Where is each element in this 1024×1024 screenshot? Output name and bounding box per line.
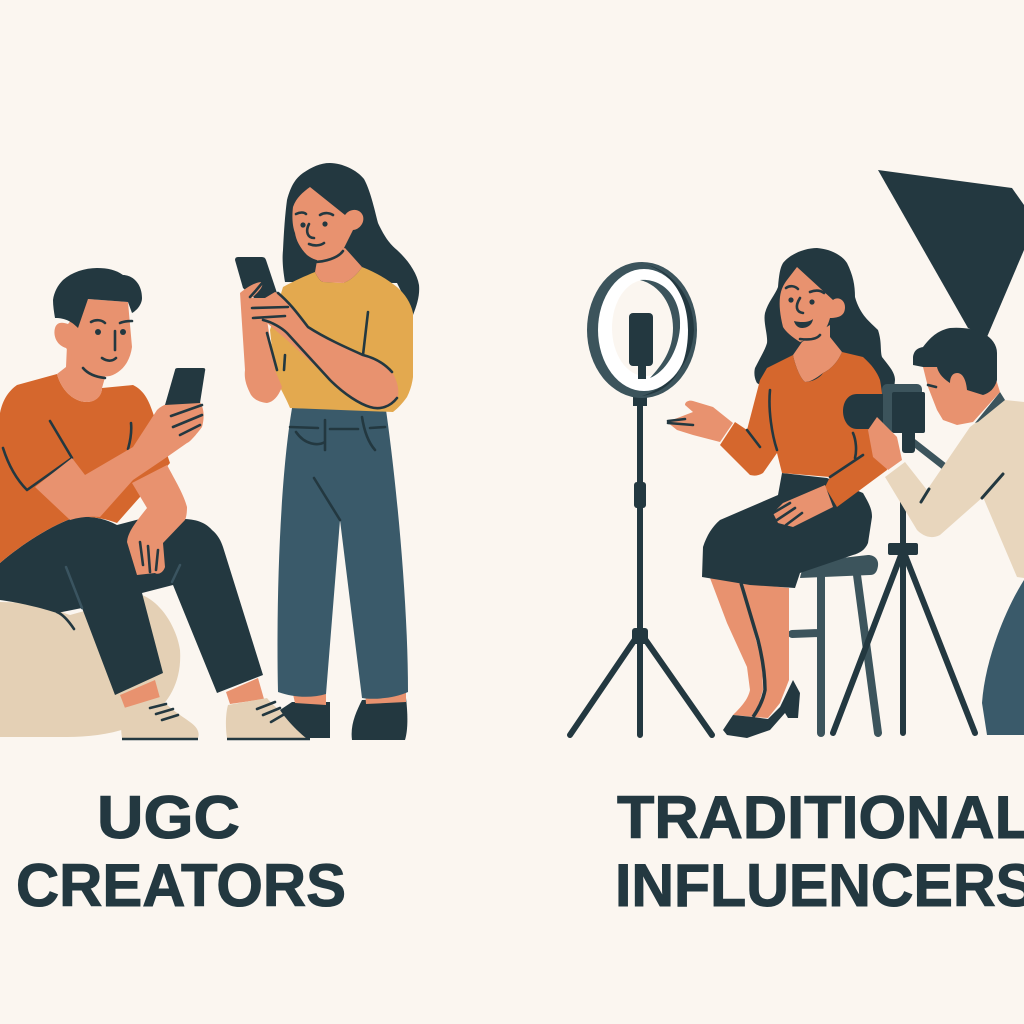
icon: ring light on tripod	[570, 262, 712, 735]
heading: UGC Creators: UGC	[97, 784, 240, 851]
crescent	[640, 280, 680, 378]
tripod	[570, 395, 712, 735]
tripod	[833, 442, 975, 733]
face details	[786, 286, 824, 340]
beanbag	[0, 595, 180, 737]
face	[292, 187, 363, 262]
far arm resting on knee	[127, 465, 187, 575]
orange blouse	[720, 352, 887, 507]
hand on knee	[773, 485, 833, 527]
stool	[792, 555, 878, 733]
illustration: seated UGC creator on beanbag	[0, 268, 310, 739]
ring	[587, 262, 697, 398]
head	[54, 299, 132, 377]
gesturing hand	[667, 401, 733, 442]
hair back	[283, 163, 419, 315]
beige jacket	[885, 400, 1024, 578]
phone	[165, 368, 205, 405]
neck	[793, 325, 842, 382]
shoes	[280, 702, 330, 738]
face details	[83, 320, 132, 378]
heading: Traditional Influencers: TRADITIONAL	[617, 784, 1024, 851]
ankles	[120, 678, 264, 708]
hair	[53, 268, 142, 328]
orange t-shirt	[0, 374, 170, 563]
heading: UGC Creators	[16, 784, 346, 919]
illustration: photographer with camera	[833, 328, 1024, 735]
illustration: seated influencer	[667, 248, 895, 738]
near arm with hand	[35, 401, 204, 520]
face details	[296, 212, 343, 262]
right arm and hand	[240, 282, 398, 408]
face	[780, 267, 845, 342]
phone	[629, 313, 653, 366]
yellow top	[270, 267, 413, 412]
neck	[315, 248, 362, 283]
skirt	[702, 473, 872, 588]
heels	[723, 680, 800, 738]
teal jeans	[278, 408, 408, 699]
heading: UGC Creators: CREATORS	[16, 852, 346, 919]
kneeling leg	[982, 580, 1024, 735]
left arm	[240, 293, 282, 403]
legs	[710, 578, 763, 717]
hair	[754, 248, 895, 400]
hand	[868, 417, 902, 470]
trousers	[0, 517, 263, 695]
hair	[913, 328, 997, 395]
icon: softbox studio light	[878, 170, 1024, 337]
hand lines	[171, 405, 202, 435]
phone	[235, 257, 277, 306]
heading: Traditional Influencers	[615, 784, 1024, 919]
face	[923, 360, 1000, 425]
neck	[57, 345, 110, 402]
blouse lines	[747, 390, 863, 477]
shoes	[121, 697, 310, 739]
camera	[843, 384, 925, 453]
collar	[975, 392, 1005, 423]
illustration: standing UGC creator	[235, 163, 419, 740]
